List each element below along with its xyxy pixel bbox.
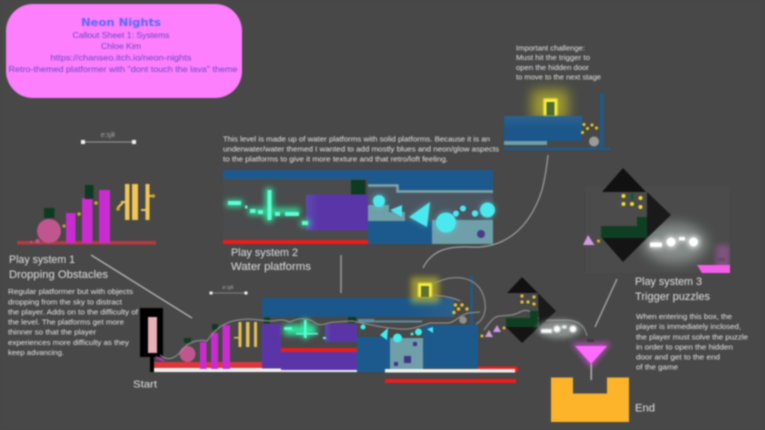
green door — [631, 193, 634, 200]
pink glow — [716, 245, 730, 273]
heading: play system 1 — [9, 254, 109, 281]
subtitle: Callout Sheet 1: Systems — [72, 31, 170, 40]
green block — [44, 208, 54, 218]
text: play system 3 description: player is immediately inclosed, — [636, 322, 741, 331]
start ground — [154, 362, 262, 368]
map lava line — [281, 348, 357, 352]
teal ledge — [368, 186, 493, 192]
text: play system 1 description: dropping from the sky to distract — [8, 298, 122, 306]
black diamond top — [602, 168, 646, 192]
green block on bar — [85, 185, 94, 199]
text: play system 2 description: to the platforms to give it more texture and that retro/loft feeling. — [223, 154, 448, 164]
text: important challenge — [516, 44, 601, 82]
map teal strip — [358, 319, 422, 322]
teal ledge — [504, 141, 547, 145]
small pink steps — [18, 239, 40, 243]
circle obstacle — [37, 219, 61, 243]
white neon halo — [650, 236, 700, 248]
cyan orb glow — [372, 194, 496, 234]
text: important challenge: to move to the next stage — [516, 72, 601, 82]
black diamond bottom — [602, 238, 647, 262]
text: play system 2 description — [223, 134, 499, 164]
text: play system 3 description: of the game — [636, 362, 678, 372]
heading: play system 2 — [231, 247, 312, 273]
text: play system 3 description — [636, 312, 748, 372]
blue floor and wall — [504, 93, 610, 150]
map cyan orbs — [360, 324, 433, 342]
arrow: system 1 to map — [91, 255, 192, 318]
map circle obstacle — [180, 346, 196, 362]
author: Chloe Kim — [101, 42, 141, 51]
ground line — [17, 241, 156, 244]
lava line — [223, 240, 368, 244]
hidden door trigger — [544, 98, 558, 116]
heading: play system 3: Trigger puzzles — [635, 291, 710, 303]
pink triangle — [583, 235, 594, 245]
magenta bar 2 — [82, 198, 92, 243]
text: play system 1 description: keep advancing. — [8, 348, 64, 357]
purple dot — [477, 230, 485, 238]
map teal block — [390, 338, 423, 369]
black diamond right — [647, 192, 671, 238]
text: play system 1 description: Regular platformer but with objects — [8, 287, 133, 296]
map blue wall — [470, 275, 473, 325]
end funnel — [571, 339, 611, 380]
map puzzle room — [506, 277, 556, 343]
heading: play system 3: Play system 3 — [635, 276, 702, 288]
text: play system 1 description: thinner so that the player — [8, 328, 97, 336]
yellow dots — [62, 194, 155, 228]
label: end: End — [635, 402, 655, 414]
text: play system 2 description: underwater/water themed I wanted to add mostly blues and neon/glow aspects — [223, 144, 499, 154]
heading: play system 1: Play system 1 — [9, 254, 75, 266]
text: important challenge: Important challenge: — [516, 44, 585, 52]
description: Retro-themed platformer with "dont touch the lava" theme — [8, 65, 238, 74]
heading: play system 2: Water platforms — [231, 261, 312, 273]
map neon green — [284, 319, 326, 339]
map ruler — [210, 285, 248, 294]
text: play system 3 description: When entering this box, the — [636, 312, 732, 321]
yellow dots — [581, 123, 598, 134]
map yellow pillars — [234, 322, 257, 347]
text: play system 1 description — [8, 287, 139, 357]
url: https://chanseo.itch.io/neon-nights — [50, 54, 192, 62]
arrow: system 3 to map — [595, 279, 617, 327]
upper water step — [368, 179, 493, 190]
blue platform — [504, 116, 582, 141]
map ruler: e:sjk — [222, 285, 234, 291]
map pink triangles — [485, 325, 501, 337]
white neon platforms — [650, 237, 698, 247]
arrow: system 2 to map — [340, 255, 342, 293]
text: play system 3 description: door and get to the end — [636, 352, 720, 362]
panel: level map — [140, 275, 629, 422]
heading: play system 3 — [635, 276, 710, 303]
trigger glow — [532, 90, 568, 120]
map grey ball — [459, 316, 467, 324]
panel: play system 1 diagram — [17, 132, 156, 244]
grey ball — [589, 136, 599, 146]
text: play system 1 description: experiences more difficulty as they — [8, 338, 129, 347]
arrow: challenge to map — [423, 155, 548, 268]
small dark block — [715, 258, 725, 262]
panel: trigger diagram — [504, 90, 610, 150]
map trigger — [411, 277, 439, 303]
neon green platforms glow — [226, 188, 310, 226]
room glow — [585, 186, 730, 273]
green block — [351, 180, 366, 194]
neon green platforms — [228, 190, 308, 225]
label: start: Start — [133, 378, 157, 390]
map purple squares — [394, 342, 417, 366]
purple block — [306, 194, 368, 230]
player route — [160, 278, 587, 359]
text: important challenge: open the hidden door — [516, 63, 589, 72]
map magenta bars — [156, 325, 230, 369]
heading: play system 2: Play system 2 — [231, 247, 298, 259]
cyan orbs — [373, 195, 495, 232]
heading: play system 1: Dropping Obstacles — [9, 269, 109, 281]
text: important challenge: Must hit the trigger to — [516, 53, 590, 62]
ruler annotation: e:sjk — [101, 132, 116, 139]
map green blocks — [184, 317, 356, 343]
map lower lava — [385, 379, 516, 383]
map purple platforms — [262, 324, 357, 369]
yellow pillars — [117, 184, 155, 220]
map upper lava right — [478, 366, 518, 372]
pink lava — [697, 265, 730, 273]
map red remainder — [255, 362, 262, 368]
map white floor right — [385, 369, 515, 372]
text: play system 1 description: the level. The platforms get more — [8, 318, 124, 326]
right background — [368, 179, 493, 244]
title: Neon Nights — [81, 17, 161, 29]
teal platform steps — [368, 205, 432, 244]
text: play system 3 description: in order to open the hidden — [636, 342, 733, 352]
white floor left — [154, 368, 363, 372]
top water band — [223, 170, 493, 179]
yellow dots — [597, 194, 642, 243]
panel: play system 2 diagram — [223, 170, 496, 244]
green platform — [601, 217, 647, 238]
end goal block — [551, 378, 629, 422]
white glow — [643, 223, 707, 263]
start gate — [140, 308, 163, 372]
magenta bar 3 — [99, 190, 110, 243]
text: play system 3 description: the player must solve the puzzle — [636, 332, 748, 342]
map white neon — [537, 320, 581, 338]
map water columns — [357, 337, 390, 372]
text: play system 2 description: This level is made up of water platforms with solid platforms. Because it is an — [223, 134, 490, 144]
magenta bar 1 — [66, 213, 76, 243]
text: play system 1 description: the player. Adds on to the difficulty of — [8, 308, 139, 316]
map yellow dots — [452, 303, 506, 338]
map white floor repair — [262, 368, 363, 372]
panel: title card — [6, 4, 242, 98]
panel: trigger puzzle room — [583, 168, 730, 273]
map water ceiling — [262, 298, 454, 317]
